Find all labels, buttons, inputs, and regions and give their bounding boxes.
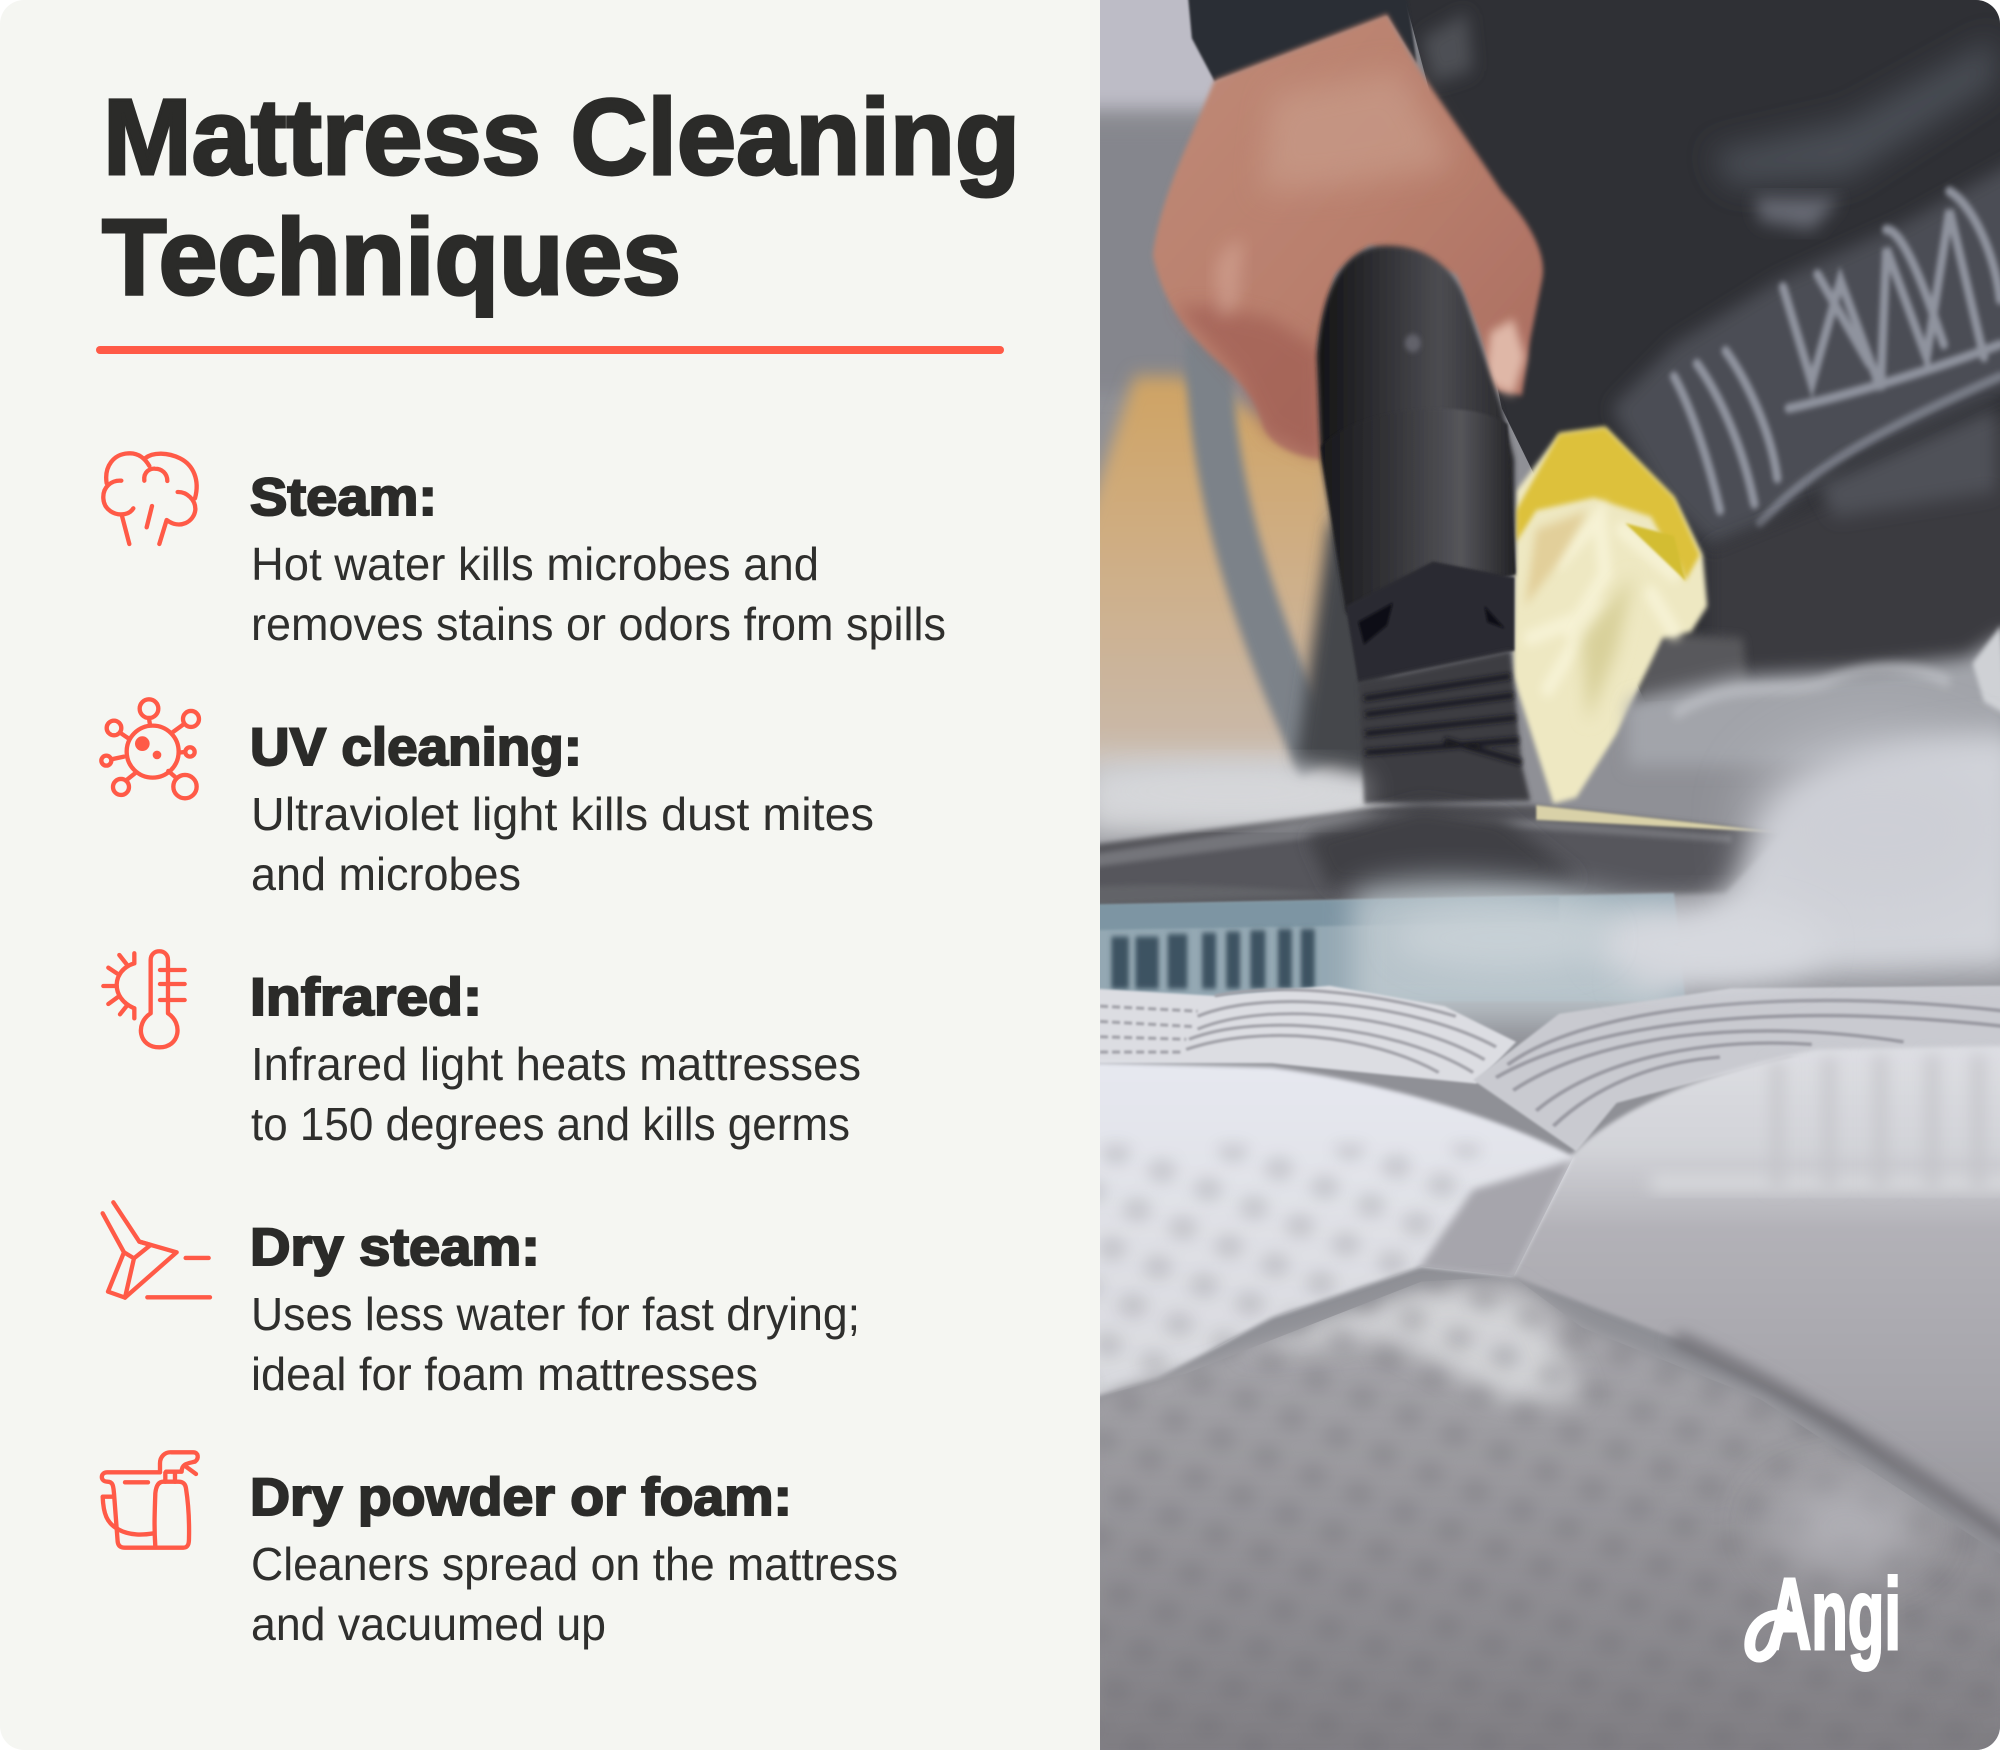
item: dry powder or foam <box>102 1452 898 1650</box>
heading: infrared: Infrared: <box>250 968 482 1027</box>
description: dry steam: ideal for foam mattresses <box>251 1348 758 1400</box>
title: Mattress Cleaning <box>103 76 1020 197</box>
right pillow <box>1513 1046 2000 1557</box>
top-left sleeve <box>1186 0 1417 82</box>
nozzle head <box>1089 805 1783 907</box>
photo: steam cloud <box>1094 625 2000 983</box>
icon: microbe <box>101 699 199 798</box>
front pillow <box>1089 1279 2000 1750</box>
photo: mattress pillows <box>1089 986 2000 1750</box>
icon: steam nozzle <box>103 1202 210 1298</box>
description: steam: Hot water kills microbes and <box>251 538 819 590</box>
left white pillow <box>1089 1062 1574 1399</box>
ribbed neck <box>1358 651 1530 804</box>
blue base band <box>1089 893 1685 1002</box>
logo: Angi <box>1750 1559 1901 1671</box>
description: infrared <box>251 1038 861 1150</box>
description: UV cleaning: and microbes <box>251 848 521 900</box>
description: dry powder or foam: and vacuumed up <box>251 1598 606 1650</box>
description: infrared: to 150 degrees and kills germs <box>251 1098 850 1150</box>
heading: steam: Steam: <box>250 468 437 527</box>
sweater <box>1398 0 2000 702</box>
photo: upper scene with hand and nozzle <box>1077 0 2000 1021</box>
title <box>102 76 1020 317</box>
description: dry powder or foam: Cleaners spread on the mattress <box>251 1538 898 1590</box>
title: Techniques <box>102 196 681 317</box>
sleeve cuff <box>1611 160 2000 549</box>
panel: techniques background <box>0 0 1101 1750</box>
description: dry steam: Uses less water for fast drying; <box>251 1288 860 1340</box>
photo: steam cleaner on mattress <box>1077 0 2000 1750</box>
logo: Angi: Angi <box>1768 1559 1901 1671</box>
item: steam <box>103 453 946 650</box>
hose <box>1208 338 1321 766</box>
item: dry steam <box>103 1202 860 1400</box>
upper-right quilted panel <box>1473 986 2000 1152</box>
description: infrared: Infrared light heats mattresses <box>251 1038 861 1090</box>
heading: dry steam: Dry steam: <box>250 1218 540 1277</box>
icon: thermometer and sun <box>103 951 185 1047</box>
heading: UV cleaning: UV cleaning: <box>250 718 582 777</box>
icon: steam cloud <box>103 453 197 544</box>
glove <box>1634 632 1749 708</box>
hand <box>1153 14 1543 459</box>
description: steam: removes stains or odors from spills <box>251 598 946 650</box>
heading: dry powder or foam: Dry powder or foam: <box>250 1468 792 1527</box>
nozzle tube <box>1317 246 1514 612</box>
description: dry powder or foam <box>251 1538 898 1650</box>
description: steam <box>251 538 946 650</box>
description: UV cleaning: Ultraviolet light kills dust mites <box>251 788 874 840</box>
upper-left quilted panel <box>1089 986 1516 1084</box>
description: dry steam <box>251 1288 860 1400</box>
description: UV cleaning <box>252 796 872 891</box>
icon: bucket and spray bottle <box>102 1452 198 1548</box>
title underline <box>96 346 1004 354</box>
item: UV cleaning <box>101 699 874 900</box>
item: infrared <box>103 951 861 1150</box>
